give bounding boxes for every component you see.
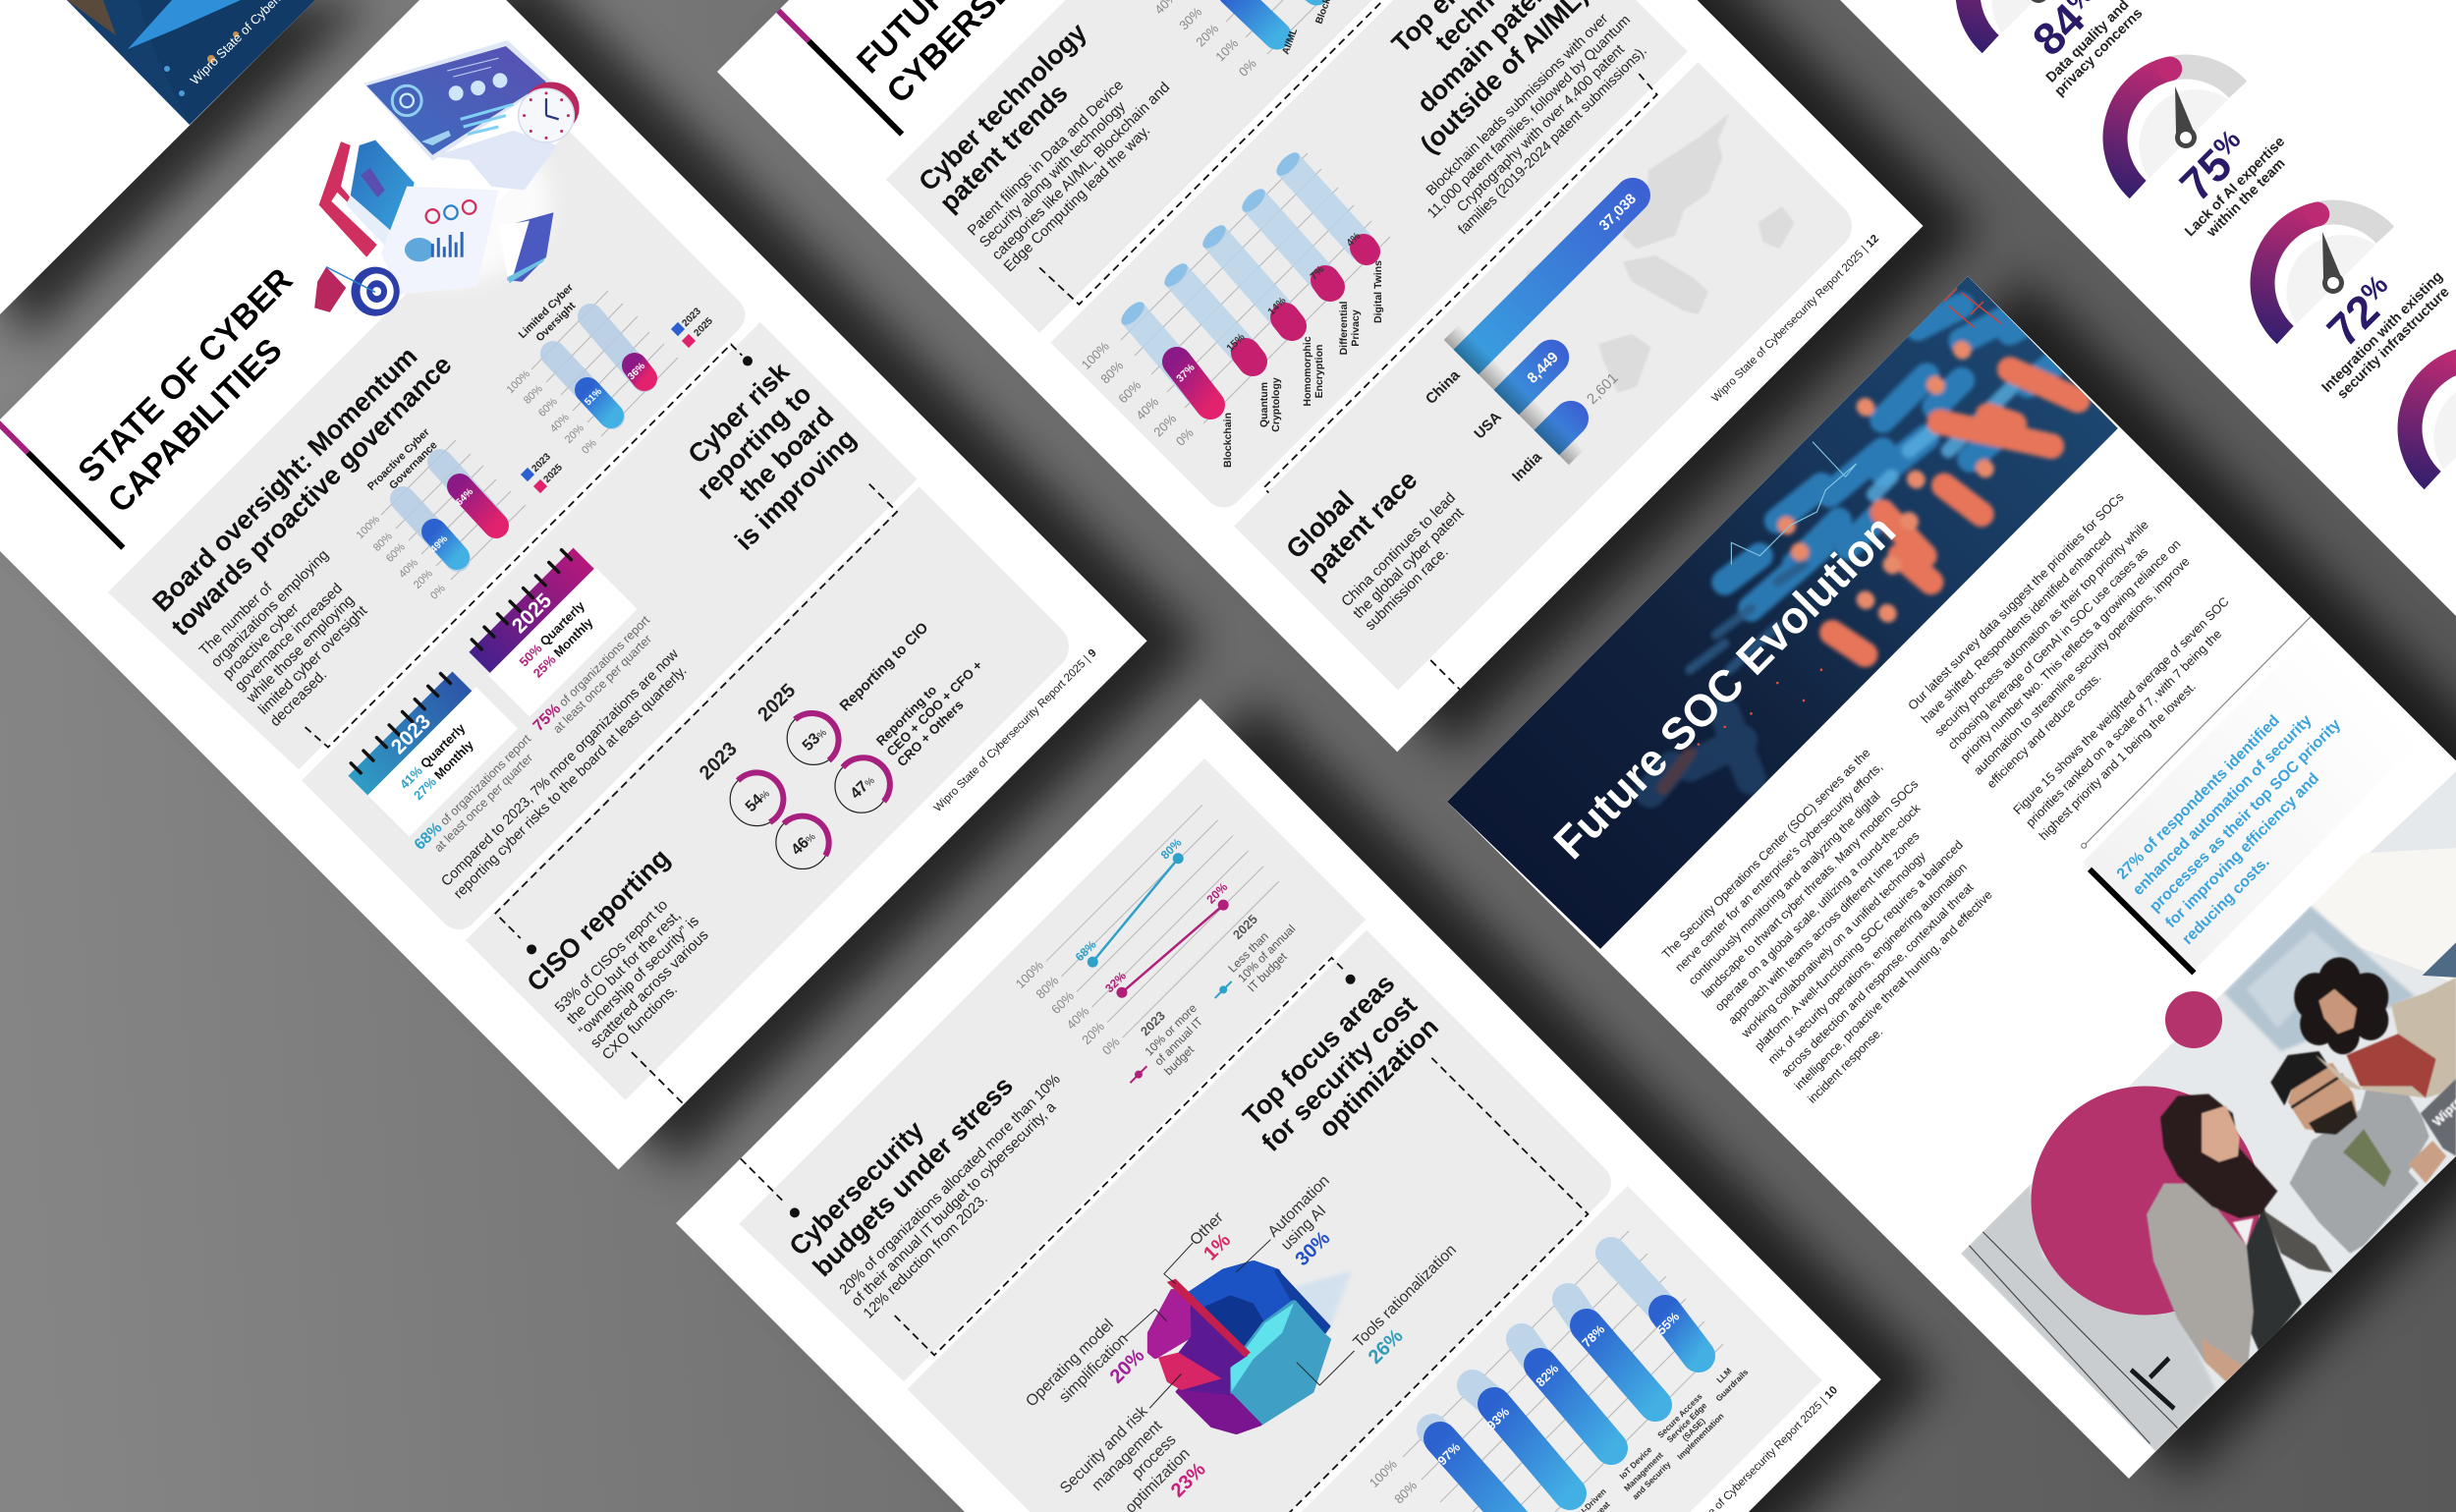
bar labels: Secure Access xyxy=(1655,1391,1704,1440)
body column 1: working collaboratively on a unified technology xyxy=(1738,849,1928,1041)
page 10: budgets under stress xyxy=(676,699,1881,1512)
chart: proactive cyber governance: 40% xyxy=(397,557,420,581)
page 12: patent race chart and footer xyxy=(1235,61,1881,706)
laptop xyxy=(2421,1079,2456,1156)
bar: USA xyxy=(1479,332,1577,428)
body: CISO: CXO functions. xyxy=(599,981,681,1063)
heading: top focus areas: optimization xyxy=(1312,1012,1444,1144)
target and flag xyxy=(314,267,400,316)
chart: limited cyber oversight: 51% xyxy=(583,386,604,408)
donut 47% xyxy=(824,747,901,823)
body: CISO: scattered across various xyxy=(587,926,712,1051)
bar labels: Implementation xyxy=(1675,1411,1726,1462)
chart: limited cyber oversight: Oversight xyxy=(533,300,579,344)
vertical category labels: Homomorphic xyxy=(1302,336,1313,407)
heading: global patent race: patent race xyxy=(1302,465,1423,586)
pie labels xyxy=(996,1107,1478,1512)
folder xyxy=(319,141,383,257)
line chart: 68% xyxy=(1073,937,1099,964)
gauge 84%: privacy concerns xyxy=(2052,6,2146,99)
divider xyxy=(2081,615,2313,849)
panel: bar chart xyxy=(1164,1186,1822,1512)
body: budgets: 12% reduction from 2023. xyxy=(860,1191,991,1321)
body column 1 xyxy=(1658,738,2027,1106)
body: patent trends: Edge Computing lead the way. xyxy=(1000,122,1153,275)
body column 1: The Security Operations Center (SOC) serves as the xyxy=(1659,746,1873,962)
bar labels: India xyxy=(1509,448,1545,485)
chart: patent technology categories: 100% xyxy=(1079,338,1112,372)
dashed connectors xyxy=(717,760,1591,1512)
heading: cyber risk: the board xyxy=(733,401,839,508)
chart: patent technology categories: 37% xyxy=(1174,362,1198,385)
body column 2: choosing leverage of GenAI in SOC use cases as xyxy=(1944,544,2150,753)
donut chart 3D xyxy=(1124,1240,1355,1432)
pie labels: Tools rationalization xyxy=(1351,1242,1460,1351)
pie labels: Automation xyxy=(1265,1172,1333,1241)
body column 1: intelligence, proactive threat hunting, and effective xyxy=(1792,888,1995,1092)
gauge 84% xyxy=(1937,0,2154,108)
man xyxy=(2270,1051,2446,1254)
chart: proactive cyber governance: Proactive Cyber xyxy=(365,426,432,493)
phone and receipt xyxy=(498,212,553,283)
line chart: of annual IT xyxy=(1151,1014,1206,1068)
heading: Future SOC Evolution: Future SOC Evolution xyxy=(1543,504,1905,868)
bar: China xyxy=(1439,170,1657,388)
pie labels: 26% xyxy=(1365,1325,1408,1369)
heading: CISO: CISO reporting xyxy=(521,843,675,997)
chart: proactive cyber governance: 100% xyxy=(355,514,382,541)
body column 2: priority number two. This reflects a growing reliance on xyxy=(1957,536,2184,764)
pie labels: 30% xyxy=(1291,1227,1335,1270)
callout panel: 27% of respondents identified xyxy=(2114,712,2283,883)
photo: team around a laptop xyxy=(1961,772,2456,1451)
heading: top focus areas: Top focus areas xyxy=(1237,968,1401,1132)
donut 53% xyxy=(776,700,851,776)
leader lines xyxy=(1124,1240,1355,1408)
slice: tools xyxy=(1230,1302,1328,1425)
heading: cyber risk: Cyber risk xyxy=(682,356,796,470)
door xyxy=(1961,1183,2215,1453)
calendar card 2023: 2023 xyxy=(387,710,435,758)
bar values: 8,449 xyxy=(1524,349,1562,387)
dot xyxy=(741,354,754,368)
callout panel: enhanced automation of security xyxy=(2130,712,2316,899)
calendar card 2023: 27% Monthly xyxy=(411,737,476,803)
body: board oversight: limited cyber oversight xyxy=(255,602,371,718)
bar chart: focus areas: 82% xyxy=(1533,1361,1562,1389)
bar labels: and Security xyxy=(1630,1459,1673,1501)
body: patent race xyxy=(1338,489,1482,634)
slice: other xyxy=(1167,1279,1251,1358)
bar chart: focus areas: 93% xyxy=(1483,1404,1513,1432)
woman right xyxy=(2294,957,2456,1097)
labels: reporting lines xyxy=(837,611,995,770)
bar labels: China xyxy=(1423,366,1464,408)
chart: patent technology categories: 20% xyxy=(1150,411,1180,439)
gauge 75%: 75 xyxy=(2170,139,2242,210)
panel: cyber risk reporting xyxy=(302,322,918,937)
body column 1: continuously monitoring and analyzing the digital xyxy=(1686,789,1883,987)
chart: limited cyber oversight: Limited Cyber xyxy=(517,281,577,341)
panel: board oversight xyxy=(108,131,754,776)
chart fragment: AI/ML top bars: 10% xyxy=(1212,35,1242,64)
dashed connector 3 xyxy=(632,1052,684,1104)
chart: limited cyber oversight: 0% xyxy=(580,437,599,457)
line chart: 80% xyxy=(1033,973,1062,1001)
body column 2: automation to streamline security operations, improve xyxy=(1971,554,2193,778)
chart: limited cyber oversight: 20% xyxy=(563,422,586,446)
body column 1: platform. A well-functioning SOC requires a balanced xyxy=(1753,838,1966,1053)
chart: limited cyber oversight: 40% xyxy=(548,412,572,435)
body: board oversight: governance increased xyxy=(232,580,346,695)
line chart: 60% xyxy=(1048,988,1077,1017)
donut 46%: 46% xyxy=(788,828,818,859)
illustration: dashboard, books, target xyxy=(314,40,580,316)
chart fragment: AI/ML top bars: 20% xyxy=(1193,21,1222,49)
slice: operating xyxy=(1149,1290,1191,1358)
chart: patent technology categories: 7% xyxy=(1308,263,1327,282)
circle: magenta small xyxy=(2165,991,2222,1048)
chart: patent technology categories: 14% xyxy=(1265,295,1289,318)
body: patent trends: Security along with technology xyxy=(977,98,1129,251)
body: patent race: the global cyber patent xyxy=(1350,504,1468,622)
window xyxy=(2224,906,2416,1051)
chart: proactive cyber governance: 2025 xyxy=(541,462,565,485)
calendar card 2025: 2025 xyxy=(508,589,556,638)
body column 1: nerve center for an enterprise's cybersecurity efforts, xyxy=(1673,760,1885,975)
bar: India xyxy=(1520,393,1595,469)
line chart: 20% xyxy=(1079,1019,1107,1047)
chart: proactive cyber governance: 80% xyxy=(371,531,395,554)
slice: security xyxy=(1179,1388,1259,1432)
year labels xyxy=(696,680,800,784)
body column 2: highest priority and 1 being the lowest. xyxy=(2036,679,2199,843)
chart: proactive cyber governance: 49% xyxy=(428,533,450,555)
body: emerging domains: 11,000 patent families, followed by Quantum xyxy=(1424,13,1634,221)
labels: reporting lines: CEO + COO + CFO + xyxy=(884,657,985,759)
gauge 72%: security infrastructure xyxy=(2334,284,2453,403)
donut 46% xyxy=(765,805,840,880)
bar chart: focus areas: 80% xyxy=(1391,1478,1421,1506)
vertical category labels: Differential xyxy=(1338,301,1350,355)
body: board oversight: proactive cyber xyxy=(220,600,303,683)
heading: board oversight: towards proactive governance xyxy=(165,350,458,642)
pie labels: using AI xyxy=(1278,1203,1329,1254)
body: patent race: submission race. xyxy=(1362,543,1452,634)
line chart: 10% or more xyxy=(1142,1001,1200,1058)
calendar card 2023: 41% Quarterly xyxy=(397,720,469,792)
panel: emerging domains xyxy=(1050,0,1688,516)
bar values xyxy=(1483,191,1720,427)
line chart: budget xyxy=(1161,1042,1198,1078)
body: board oversight: The number of xyxy=(196,579,276,659)
calendar card 2025: 50% Quarterly xyxy=(517,597,588,669)
page: cover fragment top left xyxy=(0,0,315,314)
vertical category labels xyxy=(1222,260,1384,468)
gauge 72%: Integration with existing xyxy=(2319,269,2446,396)
calendar card 2025: 25% Monthly xyxy=(530,614,596,681)
chart: proactive cyber governance: 2023 xyxy=(530,451,553,475)
callout panel: for improving efficiency and xyxy=(2162,770,2322,931)
footer: Wipro State of Cybersecurity Report 2025 | 12 xyxy=(1709,233,1881,405)
chart: limited cyber oversight: 100% xyxy=(505,368,532,396)
body column 1: approach with teams across different time zones xyxy=(1726,829,1923,1027)
fold cover with shadow xyxy=(1235,313,1611,690)
year labels: 2025 xyxy=(754,680,800,726)
line chart: 2023 xyxy=(1138,1008,1168,1038)
heading: cyber risk: reporting to xyxy=(691,379,817,505)
pedestal xyxy=(432,131,557,190)
callout panel: processes as their top SOC priority xyxy=(2147,716,2344,916)
heading: global patent race: Global xyxy=(1280,485,1360,564)
bar labels xyxy=(1575,1366,1751,1512)
calendar note 2025: at least once per quarter xyxy=(550,632,654,736)
heading: budgets: budgets under stress xyxy=(808,1071,1019,1282)
body: CISO: 53% of CISOs report to xyxy=(552,897,671,1016)
chart: patent technology categories: 4% xyxy=(1344,230,1364,249)
chart fragment: AI/ML top bars: 30% xyxy=(1176,4,1205,32)
gauge 75%: % xyxy=(2207,124,2247,162)
heading: board oversight: Board oversight: Momentum xyxy=(146,341,422,617)
panel: patent trends xyxy=(886,0,1504,333)
body: emerging domains: Cryptography with over 4,400 patent xyxy=(1454,42,1628,215)
dashed connector 1 xyxy=(306,323,742,759)
page content frame xyxy=(1541,340,2429,1231)
pie labels: 23% xyxy=(1167,1459,1210,1502)
chart: proactive cyber governance: 60% xyxy=(384,541,408,565)
body: patent trends: categories like AI/ML, Blockchain and xyxy=(988,79,1173,263)
bar chart: focus areas: 97% xyxy=(1434,1439,1464,1468)
bar values: 2,601 xyxy=(1584,369,1622,408)
bar values: 37,038 xyxy=(1596,191,1640,234)
heading: cyber risk xyxy=(662,356,863,556)
body column 1: across detection and response, contextual threat xyxy=(1778,880,1977,1080)
bar chart: focus areas: 78% xyxy=(1579,1321,1608,1350)
accent bar xyxy=(776,9,904,137)
bar labels: Guardrails xyxy=(1713,1367,1751,1403)
world map xyxy=(1527,113,1794,393)
body column 1: operate on a global scale, utilizing a round-the-clock xyxy=(1712,801,1924,1014)
clock xyxy=(519,82,580,142)
body column 2: priorities ranked on a scale of 7, with 7 being the xyxy=(2023,627,2224,830)
people xyxy=(2147,957,2456,1381)
dashed connector 2 xyxy=(468,484,921,938)
tablet dashboard xyxy=(363,40,551,161)
pie labels: Security and risk xyxy=(1057,1402,1151,1497)
panel: security cost optimization xyxy=(907,930,1619,1512)
line chart: 80% xyxy=(1158,835,1185,862)
body column 1: incident response. xyxy=(1805,1025,1885,1106)
chart: patent technology categories xyxy=(1079,148,1390,468)
bar labels: (SASE) xyxy=(1680,1416,1707,1443)
line chart: 2025 xyxy=(1230,912,1260,942)
labels: reporting lines: CRO + Others xyxy=(894,698,967,769)
comparison text: Compared to 2023, 7% more organizations are now xyxy=(438,646,682,890)
circle: magenta large xyxy=(2032,1087,2260,1315)
chart: patent technology categories: 0% xyxy=(1173,425,1197,449)
body: board oversight: decreased. xyxy=(267,666,330,730)
pie labels: 20% xyxy=(1106,1345,1149,1388)
bar labels: IoT Device xyxy=(1617,1444,1654,1481)
chart: proactive cyber governance: 0% xyxy=(428,583,448,602)
pie labels: Operating model xyxy=(1023,1316,1117,1410)
footer: Wipro State of Cybersecurity Report 2025 | 9 xyxy=(932,647,1099,814)
pie labels: management xyxy=(1088,1418,1166,1494)
bar chart: focus areas: 100% xyxy=(1367,1456,1400,1490)
body column 1: landscape to thwart cyber threats. Many modern SOCs xyxy=(1700,777,1921,1001)
heading: patent trends: Cyber technology xyxy=(913,18,1092,196)
gauge partial xyxy=(2379,327,2456,480)
chart: proactive cyber governance xyxy=(355,426,565,602)
line chart: 100% xyxy=(1013,958,1046,991)
body column 1: mix of security operations, engineering automation xyxy=(1765,861,1970,1067)
box report xyxy=(381,187,498,295)
callout panel: reducing costs. xyxy=(2179,854,2273,948)
chart fragment: AI/ML top bars: AI/ML xyxy=(1280,28,1300,56)
chart: limited cyber oversight: 2023 xyxy=(680,306,703,329)
vertical category labels: Digital Twins xyxy=(1372,260,1384,323)
chart: limited cyber oversight: 36% xyxy=(626,361,647,382)
calendar card 2023 xyxy=(343,662,518,837)
vertical category labels: Encryption xyxy=(1313,345,1325,398)
chart: proactive cyber governance: Governance xyxy=(387,439,440,492)
chart: patent technology categories: 80% xyxy=(1097,358,1127,386)
dashed connectors xyxy=(1037,0,1892,691)
gauge 72% xyxy=(2224,174,2456,407)
chart: patent technology categories: 60% xyxy=(1115,377,1144,406)
vertical category labels: Privacy xyxy=(1350,309,1362,347)
body: board oversight: organizations employing xyxy=(208,546,332,671)
vertical category labels: Quantum xyxy=(1258,382,1270,427)
year labels: 2023 xyxy=(696,738,742,784)
body: board oversight: while those employing xyxy=(243,591,358,707)
panel: patent race xyxy=(1234,62,1862,690)
gauge 72%: % xyxy=(2355,269,2394,308)
body: emerging domains: families (2019-2024 patent submissions). xyxy=(1456,43,1650,238)
body: board oversight xyxy=(195,534,391,731)
heading: budgets: Cybersecurity xyxy=(784,1115,929,1261)
body column 2: Our latest survey data suggest the priorities for SOCs xyxy=(1905,489,2127,713)
chart: patent technology categories: 15% xyxy=(1224,331,1248,355)
line chart: 40% xyxy=(1064,1003,1092,1033)
body column 2: efficiency and reduce costs. xyxy=(1983,670,2104,791)
bar labels: Management xyxy=(1622,1450,1665,1493)
body: patent trends xyxy=(965,55,1185,275)
body: budgets: of their annual IT budget to cybersecurity, a xyxy=(848,1098,1060,1310)
body: CISO xyxy=(552,889,726,1063)
bar labels: Service Edge xyxy=(1664,1400,1708,1444)
line chart xyxy=(1013,798,1323,1109)
body: CISO: “ownership of security” is xyxy=(576,913,702,1039)
chart: patent technology categories: 40% xyxy=(1133,394,1162,422)
header image xyxy=(1447,276,2118,949)
donut 53%: 53% xyxy=(800,724,830,755)
gauge 75% xyxy=(2085,36,2302,253)
labels: reporting lines: Reporting to xyxy=(873,683,939,749)
callout panel xyxy=(2081,624,2429,976)
dot xyxy=(525,942,538,956)
donut 47%: 47% xyxy=(848,772,878,803)
heading: top focus areas xyxy=(1234,968,1444,1179)
calendar note 2025: 75% of organizations report xyxy=(530,611,653,735)
gauge 75%: within the team xyxy=(2204,156,2288,241)
comparison text: reporting cyber risks to the board at least quarterly. xyxy=(451,663,691,902)
chart: limited cyber oversight: 2025 xyxy=(692,315,715,339)
calendar note 2023: 68% of organizations report xyxy=(412,730,534,854)
line chart: 20% xyxy=(1203,879,1231,907)
page 12: future of cybersecurity xyxy=(717,0,1924,752)
body: patent race: China continues to lead xyxy=(1338,489,1459,610)
woman left xyxy=(2147,1094,2332,1381)
line chart: Less than xyxy=(1225,929,1271,976)
line chart: 10% of annual xyxy=(1235,922,1298,984)
gauge 75%: Lack of AI expertise xyxy=(2182,134,2288,240)
line chart: IT budget xyxy=(1245,949,1290,994)
heading: top focus areas: for security cost xyxy=(1256,990,1423,1157)
vertical category labels: Blockchain xyxy=(1222,413,1234,468)
chart: proactive cyber governance: 20% xyxy=(412,568,435,591)
donut 54%: 54% xyxy=(743,785,773,815)
bar labels xyxy=(1423,366,1545,489)
title: CAPABILITIES xyxy=(101,331,290,520)
pie labels: 1% xyxy=(1200,1229,1235,1264)
page: future SOC evolution xyxy=(1447,276,2456,1512)
line chart: 0% xyxy=(1099,1034,1123,1058)
body: patent trends: Patent filings in Data and Device xyxy=(965,77,1127,239)
bar chart: focus areas: 55% xyxy=(1653,1309,1683,1337)
heading: patent trends: patent trends xyxy=(934,78,1074,217)
labels: reporting lines: Reporting to CIO xyxy=(837,619,932,714)
panel: CISO reporting xyxy=(466,486,1079,1100)
gauge 72%: 72 xyxy=(2317,284,2389,356)
chart: limited cyber oversight xyxy=(505,281,715,457)
chart: proactive cyber governance: 64% xyxy=(454,486,475,508)
accent bar xyxy=(0,420,125,550)
slice: automation xyxy=(1190,1262,1294,1356)
vertical category labels: Cryptology xyxy=(1270,377,1282,432)
line chart: 32% xyxy=(1102,969,1129,995)
pie labels: Other xyxy=(1187,1208,1227,1249)
body column 2: Figure 15 shows the weighted average of seven SOC xyxy=(2010,593,2232,817)
chart fragment: AI/ML top bars xyxy=(1151,0,1342,80)
donut 54% xyxy=(719,761,795,837)
chart fragment: AI/ML top bars: 0% xyxy=(1236,56,1259,80)
calendar card 2025 xyxy=(462,541,638,716)
chart: limited cyber oversight: 60% xyxy=(536,396,560,420)
panel: budgets xyxy=(739,758,1366,1385)
body column 2 xyxy=(1905,484,2262,843)
calendar note 2023: at least once per quarter xyxy=(431,751,535,855)
bar labels: LLM xyxy=(1714,1366,1734,1385)
page: AI challenges gauges xyxy=(1840,0,2456,616)
title: STATE OF CYBER xyxy=(71,261,300,490)
bar chart: focus areas xyxy=(1367,1231,1751,1512)
book xyxy=(346,140,415,250)
heading: cyber risk: is improving xyxy=(729,423,862,556)
bar labels: USA xyxy=(1471,409,1505,442)
body column 2: have shifted. Respondents identified enhanced xyxy=(1919,529,2114,726)
chart: limited cyber oversight: 80% xyxy=(522,383,545,407)
body: emerging domains: Blockchain leads submissions with over xyxy=(1423,11,1611,199)
body: CISO: the CIO but for the rest, xyxy=(564,907,684,1028)
body column 2: security process automation as their top priority while xyxy=(1931,517,2151,739)
pie labels: process xyxy=(1129,1431,1180,1483)
page 9: state of cyber capabilities xyxy=(0,0,1147,1169)
body: budgets: 20% of organizations allocated more than 10% xyxy=(836,1071,1064,1298)
pie labels: simplification xyxy=(1056,1331,1132,1406)
